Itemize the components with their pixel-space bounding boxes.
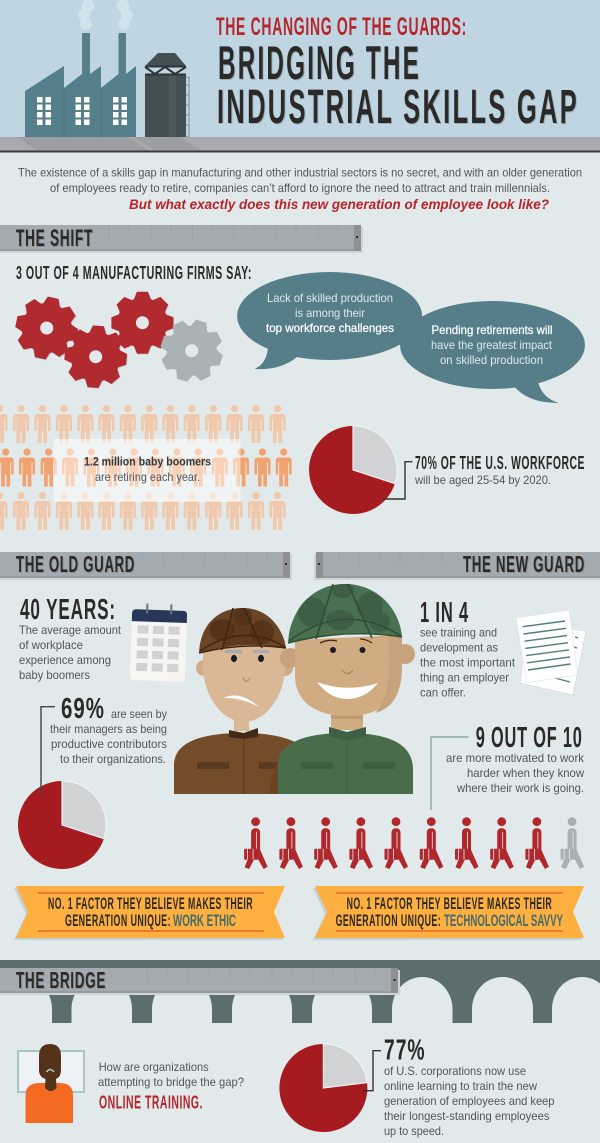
section bar: the bridge bbox=[0, 967, 400, 995]
icon: rows of people bbox=[0, 405, 292, 530]
text: online training bbox=[98, 1060, 244, 1112]
bridge illustration bbox=[0, 960, 600, 1023]
icon: silo bbox=[145, 53, 189, 137]
text: online training: attempting to bridge the gap? bbox=[98, 1075, 244, 1089]
stat: 9 out of 10 bbox=[446, 722, 585, 795]
stat: 40 years: The average amount bbox=[19, 623, 122, 637]
stat: 1 in 4 bbox=[420, 597, 516, 700]
pie chart: 70 percent bbox=[309, 426, 397, 514]
banner: new guard bbox=[313, 886, 584, 940]
stat: 69 percent: to their organizations. bbox=[60, 752, 166, 766]
speech bubble two: Pending retirements will bbox=[432, 323, 552, 337]
stat: 9 out of 10: are more motivated to work bbox=[446, 751, 585, 765]
speech bubble two bbox=[400, 301, 585, 403]
stat: 77 percent: of U.S. corporations now use bbox=[384, 1064, 526, 1078]
stat: 77 percent: their longest-standing employees bbox=[384, 1109, 550, 1123]
banner: old guard: WORK ETHIC bbox=[173, 912, 236, 930]
stat: 1 in 4: thing an employer bbox=[420, 670, 509, 684]
heading: the old guard: THE OLD GUARD bbox=[16, 551, 135, 577]
stat: 69 percent: 69% bbox=[61, 693, 105, 725]
intro text: But what exactly does this new generation of employee look like? bbox=[129, 196, 549, 212]
connector line bbox=[364, 1051, 381, 1091]
icon: gears bbox=[10, 291, 231, 391]
header panel bbox=[0, 0, 600, 152]
pie chart: 69 percent bbox=[18, 781, 106, 869]
section bar: the new guard bbox=[314, 551, 600, 580]
connector line bbox=[383, 462, 412, 499]
ground strip bbox=[0, 137, 600, 152]
icon: factory bbox=[25, 0, 136, 137]
banner: old guard: GENERATION UNIQUE: bbox=[65, 912, 171, 930]
stat: 9 out of 10: harder when they know bbox=[467, 766, 584, 780]
banner: old guard: NO. 1 FACTOR THEY BELIEVE MAKES THEIR bbox=[48, 895, 253, 913]
banner: old guard bbox=[14, 886, 285, 940]
stat: 1 in 4: can offer. bbox=[420, 686, 466, 700]
callout: baby boomers: 1.2 million baby boomers bbox=[84, 454, 211, 468]
subheading: 3 OUT OF 4 MANUFACTURING FIRMS SAY: bbox=[16, 263, 252, 283]
banner: new guard: GENERATION UNIQUE: bbox=[336, 912, 441, 930]
intro text: of employees ready to retire, companies can’t afford to ignore the need to attract and train millennials. bbox=[50, 181, 550, 195]
stat: 69 percent bbox=[50, 693, 167, 766]
stat: 1 in 4: the most important bbox=[420, 656, 516, 670]
stat: 1 in 4: see training and bbox=[420, 626, 497, 640]
speech bubble one: is among their bbox=[295, 306, 365, 320]
stat: 40 years: baby boomers bbox=[19, 668, 90, 682]
title bbox=[216, 13, 579, 134]
stat: 40 years: of workplace bbox=[19, 638, 83, 652]
speech bubble two: have the greatest impact bbox=[431, 338, 553, 352]
speech bubble one: Lack of skilled production bbox=[267, 291, 393, 305]
speech bubble one bbox=[237, 272, 422, 369]
stat: 77 percent: 77% bbox=[384, 1034, 426, 1066]
stat: 69 percent: productive contributors bbox=[51, 737, 167, 751]
speech bubble one: top workforce challenges bbox=[266, 321, 394, 335]
panel: the shift bbox=[0, 263, 585, 530]
stat: 1 in 4: 1 IN 4 bbox=[420, 597, 469, 629]
heading: the shift: THE SHIFT bbox=[16, 225, 93, 252]
stat: 77 percent: generation of employees and keep bbox=[384, 1094, 555, 1108]
stat: workforce: will be aged 25-54 by 2020. bbox=[414, 473, 551, 487]
stat: 77 percent: up to speed. bbox=[384, 1124, 444, 1138]
pie chart: 77 percent bbox=[279, 1044, 367, 1132]
stat: 1 in 4: development as bbox=[420, 640, 498, 654]
stat: 40 years: experience among bbox=[19, 653, 111, 667]
stat: 69 percent: their managers as being bbox=[50, 722, 167, 736]
character: new guard worker bbox=[278, 582, 415, 794]
connector line bbox=[41, 707, 55, 795]
stat: workforce bbox=[414, 452, 585, 487]
section bar: the old guard bbox=[0, 551, 292, 580]
stat: 77 percent bbox=[384, 1034, 555, 1138]
stat: 9 out of 10: where their work is going. bbox=[456, 781, 584, 795]
callout: baby boomers: are retiring each year. bbox=[95, 470, 200, 484]
icon: woman at monitor bbox=[18, 1044, 84, 1123]
icon: papers bbox=[516, 610, 586, 695]
icon: calendar bbox=[130, 603, 187, 682]
character: old guard worker bbox=[174, 608, 300, 794]
heading: the bridge: THE BRIDGE bbox=[16, 967, 106, 993]
stat: 40 years: 40 YEARS: bbox=[20, 594, 116, 626]
stat: 77 percent: online learning to train the new bbox=[384, 1079, 537, 1093]
callout: baby boomers bbox=[54, 439, 240, 502]
connector line bbox=[431, 737, 469, 810]
speech bubble two: on skilled production bbox=[440, 353, 543, 367]
text: online training: ONLINE TRAINING. bbox=[99, 1092, 203, 1112]
icon: walking workers bbox=[244, 817, 584, 869]
intro text bbox=[18, 166, 582, 212]
section bar: the shift bbox=[0, 225, 363, 253]
stat: 40 years bbox=[19, 594, 122, 682]
stat: 69 percent: are seen by bbox=[111, 707, 167, 721]
text: online training: How are organizations bbox=[99, 1060, 209, 1074]
